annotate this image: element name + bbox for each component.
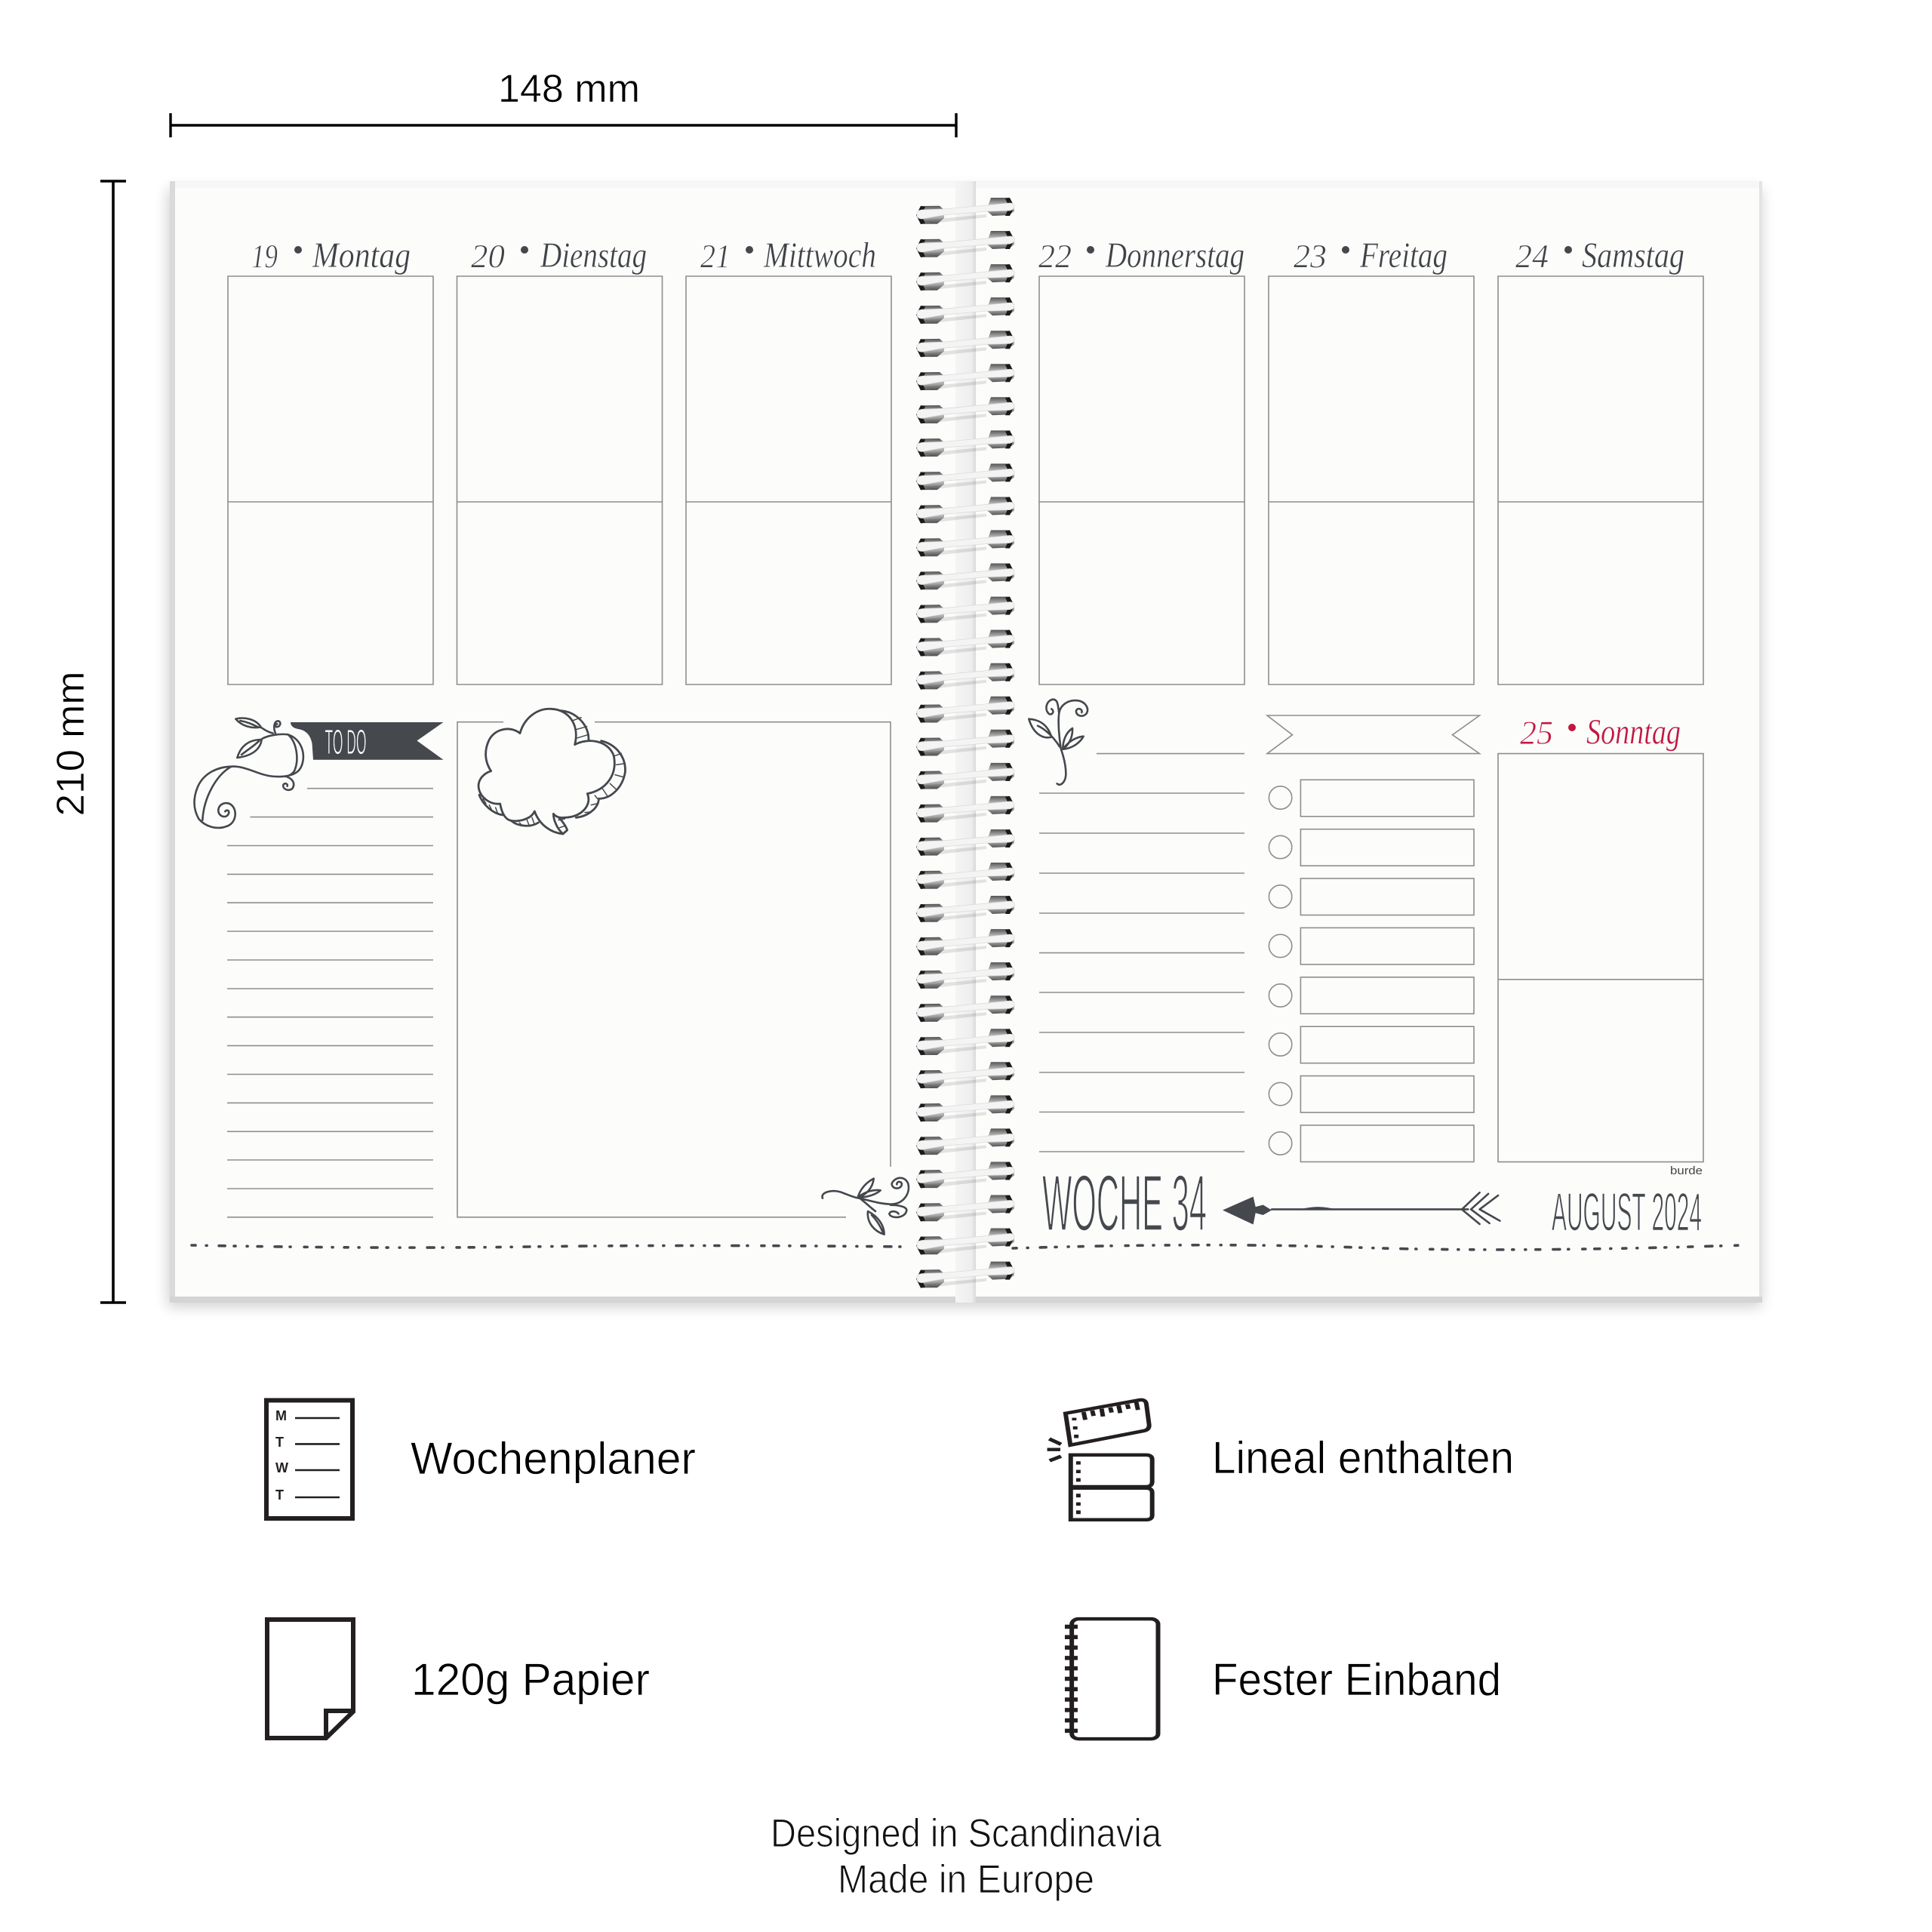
heading: 21	[700, 238, 731, 275]
day box	[228, 276, 433, 685]
text: WOCHE 34	[1042, 1159, 1207, 1248]
heading: 25	[1520, 715, 1553, 752]
feature: Wochenplaner	[266, 1401, 696, 1518]
label: 120g Papier	[411, 1654, 650, 1705]
heading	[1038, 235, 1244, 275]
day box	[1039, 276, 1244, 685]
icon: weekly planner: W	[275, 1460, 288, 1475]
heading: 24	[1515, 238, 1549, 275]
right page	[976, 181, 1762, 1303]
label: Lineal enthalten	[1212, 1432, 1514, 1483]
heading: Montag	[312, 235, 411, 275]
heading: Mittwoch	[763, 235, 876, 275]
heading	[251, 235, 411, 275]
heading: 19	[251, 238, 278, 275]
panel: Montag	[228, 235, 433, 685]
panel: notes box	[457, 709, 909, 1235]
arrow	[1223, 1192, 1500, 1224]
heading	[700, 235, 876, 275]
panel: Mittwoch	[686, 235, 891, 685]
label: Wochenplaner	[411, 1433, 696, 1484]
day box	[686, 276, 891, 685]
spine gutter	[955, 181, 977, 1303]
flower doodle	[1029, 700, 1088, 785]
day box	[457, 276, 663, 685]
panel: to do list	[194, 718, 444, 1217]
banner	[291, 722, 444, 760]
left page	[170, 181, 955, 1303]
heading	[1294, 235, 1447, 275]
vertical dimension: 210 mm	[49, 181, 126, 1303]
check circles	[1269, 786, 1292, 1155]
feature: 120g Papier	[267, 1620, 650, 1738]
panel: Dienstag	[457, 235, 663, 685]
feature: Lineal enthalten	[1048, 1400, 1514, 1520]
spiral binding	[916, 198, 1014, 1288]
page shadow	[168, 189, 1761, 1307]
height label: 210 mm	[49, 672, 93, 817]
icon: weekly planner	[266, 1401, 352, 1518]
heading: Samstag	[1582, 235, 1684, 275]
icon: paper sheet	[267, 1620, 353, 1738]
line: origin of manufacture: Made in Europe	[838, 1857, 1094, 1902]
heading	[471, 235, 647, 275]
dashed divider: right page	[1013, 1245, 1742, 1250]
heading	[1515, 235, 1684, 275]
flower doodle	[823, 1178, 909, 1235]
height measure line	[100, 181, 126, 1303]
heading: Donnerstag	[1105, 235, 1244, 275]
panel: notes lines	[1029, 700, 1244, 1152]
thought cloud doodle	[478, 709, 625, 834]
notes frame	[457, 722, 891, 1217]
day box	[1498, 276, 1703, 685]
heading: Dienstag	[540, 235, 647, 275]
ruled lines	[227, 789, 433, 1217]
icon: spiral notebook	[1065, 1619, 1158, 1739]
panel: Sonntag	[1498, 712, 1703, 1162]
day box	[1269, 276, 1474, 685]
check fields	[1300, 780, 1474, 1162]
heading: 20	[471, 238, 505, 275]
dashed divider: left page	[192, 1245, 904, 1247]
icon: weekly planner: M	[275, 1408, 287, 1423]
footer text	[771, 1811, 1161, 1902]
line: origin of design: Designed in Scandinavia	[771, 1811, 1161, 1856]
width measure line	[171, 113, 956, 137]
heading: 23	[1294, 238, 1327, 275]
icon: weekly planner: T	[275, 1435, 284, 1450]
ruled lines	[1039, 754, 1244, 1152]
panel: Samstag	[1498, 235, 1703, 685]
panel: to do list: TO DO	[325, 722, 367, 761]
text: AUGUST 2024	[1552, 1183, 1702, 1243]
width label: 148 mm	[498, 67, 640, 111]
brand mark: burde	[1670, 1164, 1703, 1177]
heading: Freitag	[1359, 235, 1447, 275]
icon: ruler	[1048, 1400, 1152, 1520]
heading	[1520, 712, 1681, 752]
label: Fester Einband	[1212, 1654, 1501, 1705]
icon: weekly planner: T	[275, 1487, 284, 1503]
panel: Donnerstag	[1038, 235, 1244, 685]
panel: checklist	[1267, 715, 1479, 1162]
open notebook	[168, 181, 1762, 1307]
heading: 22	[1038, 238, 1072, 275]
heading: Sonntag	[1586, 712, 1681, 752]
day box	[1498, 754, 1703, 1162]
horizontal dimension: 148 mm	[171, 67, 956, 137]
ribbon header	[1267, 715, 1479, 754]
panel: Freitag	[1269, 235, 1474, 685]
feature: Fester Einband	[1065, 1619, 1501, 1739]
vine doodle	[194, 718, 303, 828]
